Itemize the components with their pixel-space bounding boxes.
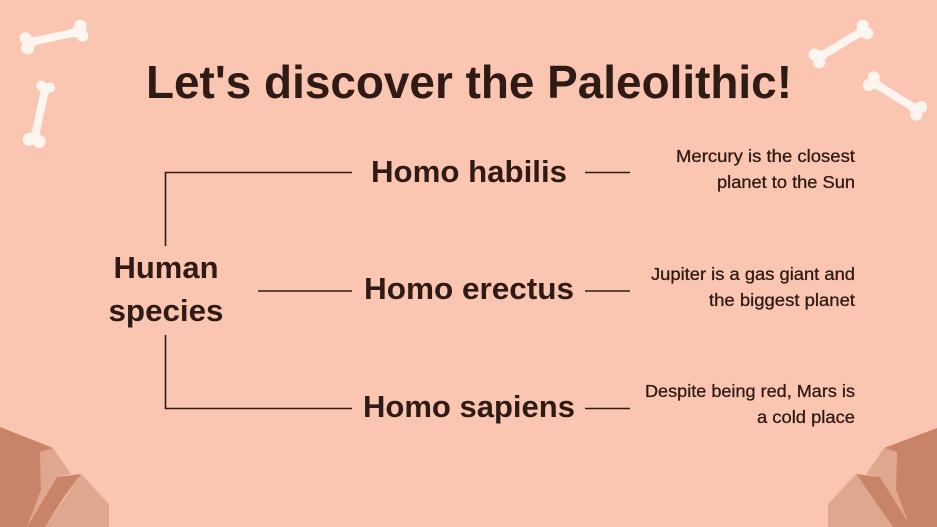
connector: middle branch (258, 290, 352, 292)
icon: bone left vertical (22, 79, 58, 149)
icon: rocks bottom right (828, 428, 937, 527)
description: Mercury: Mercury is the closest (676, 146, 855, 166)
description: Jupiter: Jupiter is a gas giant and (651, 264, 855, 284)
description: Mars: Despite being red, Mars is (645, 381, 855, 401)
root label: Human species: Human (114, 250, 218, 285)
description: Mercury: planet to the Sun (717, 172, 855, 192)
branch: Homo sapiens: Homo sapiens (363, 389, 575, 424)
title: Let's discover the Paleolithic! (146, 56, 792, 108)
description: Mars (645, 381, 855, 427)
root label: Human species (108, 250, 224, 328)
description: Mars: a cold place (757, 407, 855, 427)
description: Jupiter (651, 264, 855, 310)
icon: bone top left (18, 19, 90, 55)
icon: rocks bottom left (0, 427, 109, 527)
connector: top branch (166, 172, 352, 246)
icon: bone right (861, 69, 929, 123)
description: Jupiter: the biggest planet (709, 290, 855, 310)
icon: bone top right (806, 17, 876, 71)
description: Mercury (676, 146, 855, 192)
connector: bottom branch (166, 335, 352, 408)
branch: Homo habilis: Homo habilis (371, 154, 567, 189)
root label: Human species: species (108, 293, 224, 328)
branch: Homo erectus: Homo erectus (364, 271, 574, 306)
